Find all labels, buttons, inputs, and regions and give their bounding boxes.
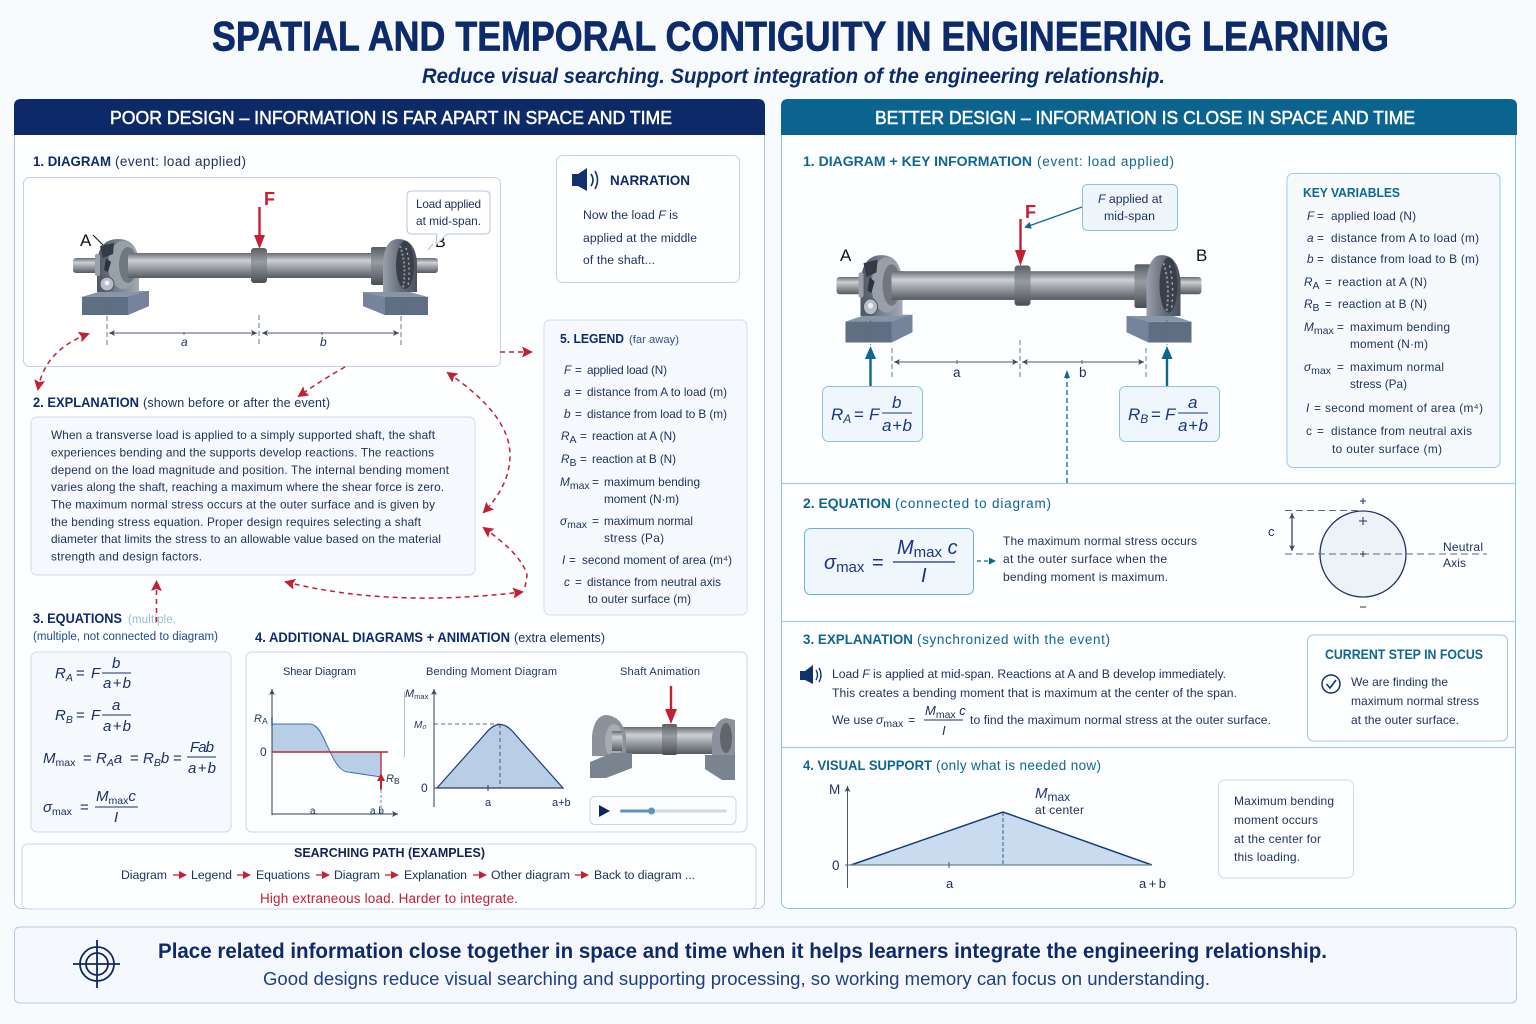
key variable entries: R — [1304, 297, 1313, 311]
formula box RA: a+b — [882, 416, 912, 435]
shaft and bearings illustration — [836, 255, 1202, 342]
legend entries: R — [561, 452, 570, 466]
legend entries: maximum normal — [604, 514, 693, 528]
synchronized explanation: to find the maximum normal stress at the outer surface. — [970, 713, 1271, 727]
shaft animation: Shaft Animation — [620, 666, 700, 678]
legend entries: distance from neutral axis — [587, 575, 721, 589]
key variable entries: a — [1307, 231, 1314, 245]
heading: 3 explanation — [803, 631, 1110, 647]
heading: 2 equation: (connected to diagram) — [895, 496, 1051, 511]
key variable entries: = — [1325, 297, 1332, 311]
equation RA: = — [76, 665, 85, 682]
shear diagram: a b — [370, 806, 384, 817]
key variable entries: maximum normal — [1350, 360, 1444, 374]
key variable entries: applied load (N) — [1331, 209, 1416, 223]
bending moment diagram: 0 — [421, 781, 428, 795]
equation RA: R — [55, 665, 66, 682]
panel: searching path: High extraneous load. Harder to integrate. — [260, 891, 518, 906]
equation Mmax: B — [154, 757, 161, 769]
dimensions a and b: a — [181, 335, 188, 349]
better design header: BETTER DESIGN – INFORMATION IS CLOSE IN SPACE AND TIME — [875, 108, 1415, 128]
formula box RB: B — [1140, 412, 1148, 426]
narration text: Now the load F is — [583, 208, 678, 222]
dimensions a and b: b — [320, 335, 327, 349]
moment chart: max — [1048, 790, 1070, 804]
equation sigma max: = — [80, 799, 89, 816]
connector arrow to note — [977, 560, 994, 562]
key variable entries: max — [1311, 365, 1332, 377]
legend entries: = — [575, 363, 582, 377]
equation RA: A — [65, 672, 73, 684]
synchronized explanation: max — [936, 709, 956, 721]
panel: current step in focus: CURRENT STEP IN FOCUS — [1325, 647, 1483, 662]
legend entries: σ — [560, 514, 567, 528]
heading: 4 visual support: 4. VISUAL SUPPORT — [803, 757, 932, 773]
legend entries: = — [580, 429, 587, 443]
panel: narration: NARRATION — [610, 172, 690, 188]
key variable entries: M — [1304, 320, 1314, 334]
panel: legend: (far away) — [629, 334, 679, 346]
legend entries: = — [575, 407, 582, 421]
legend entries: stress (Pa) — [604, 531, 664, 545]
heading: 4 visual support: (only what is needed now) — [936, 758, 1101, 773]
formula box RB: = — [1151, 405, 1161, 424]
panel: legend — [544, 320, 747, 615]
formula box RA: R — [831, 405, 843, 424]
search sequence: Diagram — [334, 868, 380, 882]
legend entries: a — [564, 385, 571, 399]
heading: 2 equation — [803, 495, 1051, 511]
shaft animation — [590, 666, 735, 780]
equation note: at the outer surface when the — [1003, 552, 1167, 566]
panel: moment note: Maximum bending — [1234, 794, 1334, 808]
equation box: M — [897, 537, 914, 559]
key variable entries: to outer surface (m) — [1332, 442, 1442, 456]
panel: shaft diagram — [24, 178, 500, 366]
legend entries: M — [560, 475, 570, 489]
legend entries: b — [564, 407, 571, 421]
equation sigma max: max — [52, 806, 73, 818]
connector arrow to equation — [1064, 370, 1070, 483]
dimensions a and b — [870, 320, 1167, 380]
legend entries: c — [564, 575, 570, 589]
panel: key variables: KEY VARIABLES — [1303, 185, 1400, 200]
panel: current step in focus: maximum normal stress — [1351, 694, 1479, 708]
formula box RB: a+b — [1178, 416, 1208, 435]
equation RA: F — [91, 665, 101, 682]
support label A: A — [80, 231, 92, 250]
load arrow F: F — [264, 189, 275, 209]
key variable entries: = — [1317, 424, 1324, 438]
formula box RB — [1120, 386, 1220, 442]
heading: 3 explanation: (synchronized with the event) — [917, 632, 1110, 647]
reaction arrow A — [865, 346, 876, 386]
moment chart: 0 — [832, 858, 840, 873]
key variable entries: max — [1314, 325, 1334, 337]
equation RB: a — [112, 697, 120, 714]
moment chart: M — [1035, 785, 1048, 802]
key variable entries: maximum bending — [1350, 320, 1450, 334]
panel: current step in focus — [1308, 635, 1508, 741]
moment chart — [829, 782, 1166, 891]
cross-section diagram: c — [1268, 524, 1275, 539]
synchronized explanation: max — [883, 718, 904, 730]
formula box RA: A — [842, 412, 851, 426]
callout: F applied at mid-span: mid-span — [1104, 209, 1155, 223]
synchronized explanation: This creates a bending moment that is maximum at the center of the span. — [832, 686, 1237, 700]
legend entries: reaction at A (N) — [592, 429, 676, 443]
equation note: bending moment is maximum. — [1003, 570, 1168, 584]
panel: narration — [556, 156, 740, 282]
heading: 2 explanation: 2. EXPLANATION — [33, 394, 139, 410]
key variable entries: reaction at A (N) — [1338, 275, 1427, 289]
equation note: The maximum normal stress occurs — [1003, 534, 1197, 548]
panel: explanation text — [31, 417, 475, 575]
narration text: of the shaft... — [583, 253, 655, 267]
panel: moment note: at the center for — [1234, 832, 1321, 846]
equation RB: R — [55, 707, 66, 724]
formula box RA: b — [892, 393, 901, 412]
synchronized explanation: I — [942, 723, 946, 738]
legend entries: distance from load to B (m) — [587, 407, 727, 421]
heading: 1 diagram — [33, 153, 246, 169]
equation sigma max: M — [96, 788, 108, 805]
panel: explanation text: When a transverse load is applied to a simply supported shaft, the shaft — [51, 428, 436, 442]
dimensions a and b — [107, 300, 401, 349]
panel: explanation text: varies along the shaft, reaching a maximum where the shear force is zero. — [51, 480, 444, 494]
cross-section diagram: Axis — [1443, 556, 1466, 570]
panel: legend: 5. LEGEND — [560, 331, 624, 346]
panel: equations — [31, 652, 231, 832]
synchronized explanation — [832, 667, 1271, 738]
shear diagram: R — [386, 773, 394, 785]
load arrow F: F — [1025, 202, 1036, 222]
equation RB — [55, 697, 131, 735]
heading: 1 diagram + key information — [803, 153, 1174, 169]
key variable entries: stress (Pa) — [1350, 377, 1407, 391]
equation RB: B — [66, 714, 73, 726]
equation Mmax: Fab — [190, 739, 214, 756]
key variable entries: c — [1306, 424, 1312, 438]
legend entries: reaction at B (N) — [592, 452, 676, 466]
key variable entries: = — [1337, 320, 1344, 334]
equation Mmax: a+b — [188, 760, 216, 777]
search sequence: Explanation — [404, 868, 467, 882]
equation Mmax: M — [43, 750, 56, 767]
equation sigma max: c — [128, 788, 136, 805]
equation sigma max: I — [114, 809, 118, 826]
bending moment diagram: a+b — [552, 797, 571, 809]
key variable entries: R — [1304, 275, 1313, 289]
legend entries: I — [562, 553, 566, 567]
heading: 3 equations: (multiple, not connected to diagram) — [33, 631, 218, 643]
key variable entries: = — [1314, 401, 1321, 415]
callout: F applied at mid-span: F applied at — [1098, 192, 1163, 206]
shear diagram: 0 — [260, 745, 267, 759]
panel: explanation text: depend on the load magnitude and position. The internal bending moment — [51, 463, 450, 477]
heading: 3 equations: 3. EQUATIONS — [33, 610, 122, 626]
integrated shaft diagram: B — [1196, 246, 1207, 265]
legend entries: max — [567, 519, 588, 531]
legend entries: = — [592, 514, 599, 528]
equation RB: F — [91, 707, 101, 724]
equation note — [1003, 534, 1197, 584]
heading: 2 explanation: (shown before or after the event) — [143, 396, 330, 410]
equation box: σ — [824, 552, 836, 574]
heading: 4 additional diagrams: 4. ADDITIONAL DIAGRAMS + ANIMATION — [255, 629, 510, 645]
panel: key variables — [1287, 174, 1500, 468]
key variable entries: = — [1317, 252, 1324, 266]
shear diagram: A — [262, 716, 268, 726]
narration text — [583, 208, 697, 267]
key variable entries: = — [1337, 360, 1344, 374]
load arrow F — [1015, 202, 1036, 266]
panel: current step in focus: at the outer surface. — [1351, 713, 1459, 727]
subtitle: Reduce visual searching. Support integration of the engineering relationship. — [422, 65, 1165, 88]
formula box RA: F — [869, 405, 881, 424]
better design header — [781, 99, 1517, 135]
panel: explanation text: diameter that limits the stress to an allowable value based on the material — [51, 532, 441, 546]
callout: load applied: at mid-span. — [416, 214, 481, 228]
shear diagram — [254, 666, 400, 817]
callout: load applied: Load applied — [416, 197, 481, 211]
panel: better design — [781, 99, 1517, 908]
shear diagram: a — [310, 806, 316, 817]
heading: 4 additional diagrams: (extra elements) — [514, 631, 605, 645]
synchronized explanation: = — [908, 713, 915, 727]
equation Mmax — [43, 739, 216, 777]
load arrow F — [254, 189, 275, 249]
equation box: I — [921, 565, 927, 587]
equation sigma max — [43, 788, 138, 826]
panel: searching path — [22, 844, 756, 909]
legend entries: B — [570, 457, 577, 469]
panel: explanation text: strength and design factors. — [51, 550, 202, 564]
synchronized explanation: We use — [832, 713, 873, 727]
callout: F applied at mid-span — [1026, 184, 1178, 230]
search sequence: Diagram — [121, 868, 167, 882]
synchronized explanation: M — [925, 703, 936, 718]
legend entries: F — [564, 363, 572, 377]
panel: moment note: moment occurs — [1234, 813, 1318, 827]
equation box: = — [872, 552, 884, 574]
icon: check circle — [1322, 675, 1340, 693]
heading: 4 visual support — [803, 757, 1101, 773]
equation Mmax: R — [143, 750, 154, 767]
poor design header: POOR DESIGN – INFORMATION IS FAR APART IN SPACE AND TIME — [110, 108, 672, 128]
key variable entries: distance from A to load (m) — [1331, 231, 1479, 245]
equation RA — [55, 655, 131, 692]
legend entries: = — [575, 575, 582, 589]
support label A — [80, 231, 103, 250]
moment chart: a+b — [1139, 876, 1166, 891]
key variable entries: = — [1317, 231, 1324, 245]
dimensions a and b: a — [953, 365, 961, 380]
equation RB: a+b — [103, 718, 131, 735]
shaft and bearings illustration — [73, 239, 438, 315]
equation RA: b — [112, 655, 120, 672]
equation Mmax: R — [96, 750, 107, 767]
search sequence: Back to diagram ... — [594, 868, 695, 882]
equation box: c — [942, 537, 958, 559]
panel: takeaway — [14, 927, 1516, 1003]
key variable entries: = — [1317, 209, 1324, 223]
panel: explanation text: The maximum normal stress occurs at the outer surface and is given by — [51, 498, 435, 512]
synchronized explanation: σ — [876, 713, 883, 727]
equation Mmax: = — [83, 750, 92, 767]
legend entries: distance from A to load (m) — [587, 385, 727, 399]
integrated shaft diagram: A — [840, 246, 852, 265]
key variable entries: reaction at B (N) — [1338, 297, 1427, 311]
heading: 1 diagram + key information: 1. DIAGRAM + KEY INFORMATION — [803, 153, 1032, 169]
equation box: max — [914, 544, 943, 561]
formula box RB: F — [1165, 405, 1177, 424]
bending moment diagram: max — [414, 692, 429, 701]
equation Mmax: a — [114, 750, 122, 767]
panel: moment note: this loading. — [1234, 850, 1300, 864]
bending moment diagram: a — [485, 797, 492, 809]
key variable entries: A — [1313, 280, 1320, 292]
legend entries: = — [575, 385, 582, 399]
searching arrows — [38, 334, 531, 622]
equation Mmax: A — [106, 757, 114, 769]
legend entries: R — [561, 429, 570, 443]
equation box: max — [836, 559, 865, 576]
search sequence — [121, 868, 695, 882]
key variable entries: distance from load to B (m) — [1331, 252, 1479, 266]
formula box RA — [822, 386, 922, 442]
equation Mmax: = — [173, 750, 182, 767]
heading: 1 diagram: (event: load applied) — [115, 154, 246, 169]
formula box RB: R — [1128, 405, 1140, 424]
legend entries: applied load (N) — [587, 363, 667, 377]
equation box — [804, 528, 974, 594]
shear diagram: Shear Diagram — [283, 666, 356, 678]
equation RB: = — [76, 707, 85, 724]
poor design header — [14, 99, 765, 135]
panel: explanation text: the bending stress equation. Proper design requires selecting a shaft — [51, 515, 422, 529]
bending moment diagram: M — [405, 688, 414, 700]
takeaway headline: Place related information close together in space and time when it helps learners integrate the engineering relationship. — [158, 940, 1327, 963]
panel: searching path: SEARCHING PATH (EXAMPLES) — [294, 845, 485, 860]
panel: explanation text: experiences bending and the supports develop reactions. The reactions — [51, 446, 434, 460]
key variable entries: distance from neutral axis — [1331, 424, 1472, 438]
heading: 1 diagram + key information: (event: load applied) — [1037, 154, 1174, 169]
key variable entries: = — [1325, 275, 1332, 289]
narration text: applied at the middle — [583, 231, 697, 245]
search sequence: Other diagram — [491, 868, 570, 882]
moment chart: a — [946, 876, 954, 891]
panel: moment note — [1218, 780, 1354, 878]
legend entries: to outer surface (m) — [588, 592, 691, 606]
search sequence: Legend — [191, 868, 232, 882]
legend entries: moment (N·m) — [604, 492, 679, 506]
icon: speaker — [572, 168, 598, 191]
legend entries: = — [569, 553, 576, 567]
callout: load applied — [407, 191, 490, 245]
key variable entries: F — [1307, 209, 1315, 223]
key variable entries: moment (N·m) — [1350, 337, 1428, 351]
heading: 2 equation: 2. EQUATION — [803, 495, 891, 511]
formula box RA: = — [854, 405, 864, 424]
panel: additional diagrams — [246, 652, 747, 832]
heading: 3 explanation: 3. EXPLANATION — [803, 631, 913, 647]
equation Mmax: max — [56, 757, 76, 769]
moment chart: at center — [1035, 803, 1084, 817]
reaction arrow B — [1162, 346, 1172, 386]
legend entries: = — [592, 475, 599, 489]
equation Mmax: = — [130, 750, 139, 767]
dimensions a and b: b — [1079, 365, 1087, 380]
key variable entries — [1304, 209, 1483, 456]
synchronized explanation: c — [956, 703, 966, 718]
bending moment diagram — [404, 666, 571, 809]
key variable entries: second moment of area (m⁴) — [1325, 401, 1483, 415]
support label B: B — [435, 234, 446, 251]
synchronized explanation: Load F is applied at mid-span. Reactions at A and B develop immediately. — [832, 667, 1226, 681]
integrated shaft diagram — [822, 184, 1220, 483]
support label B — [428, 234, 446, 251]
legend entries: A — [570, 434, 577, 446]
legend entries — [560, 363, 732, 606]
search sequence: Equations — [256, 868, 310, 882]
key variable entries: B — [1313, 302, 1320, 314]
shear diagram: R — [254, 713, 262, 725]
shear diagram: B — [394, 776, 400, 786]
equation RA: a+b — [103, 675, 131, 692]
animation player — [590, 796, 736, 824]
equation sigma max: σ — [43, 799, 52, 816]
key variable entries: b — [1307, 252, 1314, 266]
icon: target — [73, 940, 120, 988]
legend entries: = — [580, 452, 587, 466]
heading: 3 equations: (multiple, — [128, 614, 176, 626]
bending moment diagram: M₀ — [414, 720, 427, 731]
equation Mmax: b — [161, 750, 169, 767]
panel: current step in focus: We are finding the — [1351, 675, 1448, 689]
cross-section diagram — [1268, 498, 1487, 607]
heading: 2 explanation — [33, 394, 330, 410]
takeaway detail: Good designs reduce visual searching and supporting processing, so working memory can focus on understanding. — [263, 968, 1210, 989]
heading: 3 equations — [33, 610, 218, 643]
legend entries: maximum bending — [604, 475, 700, 489]
bending moment diagram: Bending Moment Diagram — [426, 666, 557, 678]
legend entries: max — [570, 480, 590, 492]
equation sigma max: max — [108, 795, 129, 807]
heading: 1 diagram: 1. DIAGRAM — [33, 153, 111, 169]
moment chart: M — [829, 782, 840, 797]
key variable entries: I — [1306, 401, 1310, 415]
key variable entries: σ — [1304, 360, 1311, 374]
panel: poor design — [14, 99, 765, 909]
cross-section diagram: Neutral — [1443, 540, 1483, 554]
formula box RB: a — [1188, 393, 1197, 412]
icon: speaker — [800, 665, 821, 684]
legend entries: second moment of area (m⁴) — [582, 553, 732, 567]
